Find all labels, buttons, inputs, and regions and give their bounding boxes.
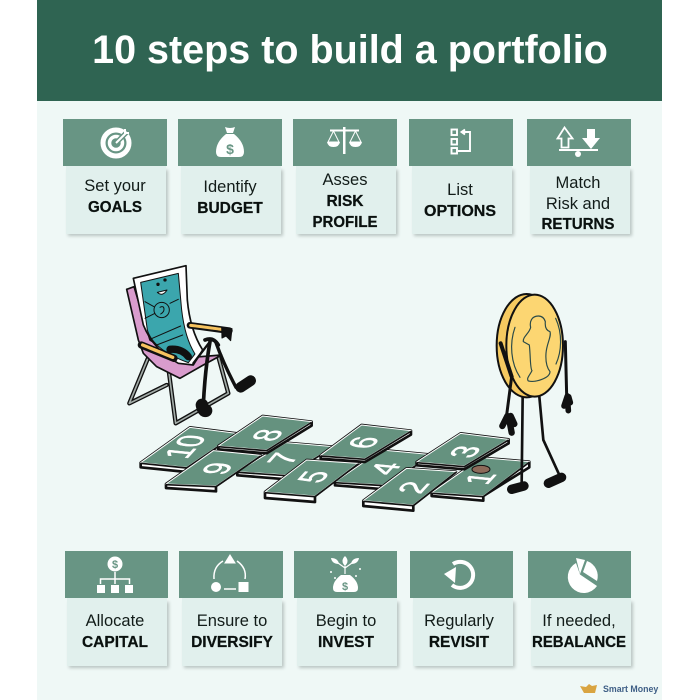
character limbs — [170, 339, 251, 411]
tile 8 — [218, 416, 312, 453]
text: identify budget: BUDGET — [197, 200, 263, 217]
tile 2: 2 — [388, 480, 438, 495]
title: 10 steps to build a portfolio — [92, 28, 608, 72]
armrest right — [190, 325, 232, 341]
panel: list options — [409, 119, 514, 236]
text: asses risk profile — [312, 171, 378, 231]
paper body — [133, 266, 203, 365]
text: match risk and returns: Risk and — [546, 195, 610, 213]
tile 7: 7 — [258, 451, 308, 466]
text: allocate capital: Allocate — [86, 612, 144, 630]
title banner — [37, 0, 662, 101]
tile 4 — [335, 450, 432, 489]
text: set your goals: Set your — [84, 177, 146, 195]
tile 5 — [265, 460, 358, 502]
illustration: coin character — [497, 294, 570, 489]
text: match risk and returns: RETURNS — [542, 216, 614, 233]
armrest left — [141, 345, 174, 358]
text: begin to invest — [316, 612, 376, 651]
tile 3 — [417, 433, 509, 469]
text: list options: List — [447, 181, 473, 199]
text: asses risk profile: PROFILE — [312, 214, 378, 231]
panel: ensure to diversify — [179, 551, 284, 668]
text: allocate capital — [82, 612, 148, 651]
text: regularly revisit: Regularly — [424, 612, 495, 630]
tile 6: 6 — [338, 435, 388, 450]
text: set your goals — [84, 177, 146, 216]
panel: identify budget — [178, 119, 283, 236]
text: set your goals: GOALS — [88, 199, 142, 216]
text: match risk and returns — [542, 174, 614, 233]
coin figure — [523, 316, 550, 381]
text: if needed, rebalance — [532, 612, 626, 651]
tile 9 — [166, 451, 261, 491]
panel: asses risk profile — [293, 119, 398, 236]
coin body — [497, 294, 563, 397]
chair frame — [129, 352, 228, 423]
text: asses risk profile: RISK — [326, 193, 364, 210]
text: ensure to diversify: DIVERSIFY — [191, 634, 274, 651]
tile 1: 1 — [455, 471, 505, 486]
coin legs — [512, 397, 562, 489]
icon: list — [452, 130, 470, 154]
icon: scales — [327, 127, 362, 154]
icon: circular arrow — [444, 562, 473, 588]
panel: allocate capital — [65, 551, 169, 668]
tile 6 — [321, 425, 411, 462]
text: regularly revisit: REVISIT — [429, 634, 490, 651]
panel: match risk and returns — [527, 119, 632, 236]
text: begin to invest: Begin to — [316, 612, 376, 630]
illustration: paper character in a folding chair — [127, 266, 251, 423]
icon: pie chart — [568, 558, 598, 593]
text: identify budget — [197, 178, 263, 217]
coin right arm — [564, 342, 570, 411]
chair fabric — [127, 287, 222, 378]
icon: target — [103, 129, 129, 156]
stone on tile 1 — [472, 465, 490, 473]
icon: org chart: $ — [112, 559, 118, 571]
text: identify budget: Identify — [203, 178, 257, 196]
icon: money bag: $ — [226, 141, 234, 157]
tile 8: 8 — [242, 427, 292, 443]
tile 1 — [432, 458, 529, 501]
tile 9: 9 — [192, 461, 242, 476]
logo: smart money: Smart Money — [603, 684, 658, 694]
icon: up and down arrows on balance — [558, 128, 600, 157]
text: allocate capital: CAPITAL — [82, 634, 148, 651]
paper teal face — [141, 273, 195, 363]
tile 3: 3 — [440, 444, 490, 460]
text: ensure to diversify: Ensure to — [197, 612, 267, 630]
tile 10 — [141, 427, 237, 472]
coin left arm — [501, 343, 514, 433]
tile 7 — [237, 443, 333, 479]
tile 5: 5 — [288, 469, 338, 485]
text: ensure to diversify — [191, 612, 274, 651]
text: list options — [424, 181, 496, 220]
text: if needed, rebalance: REBALANCE — [532, 634, 626, 651]
icon: plant growing from money bag: $ — [342, 581, 348, 593]
text: list options: OPTIONS — [424, 203, 496, 220]
face and bill details — [145, 278, 183, 345]
tile 10: 10 — [155, 433, 215, 460]
text: asses risk profile: Asses — [323, 171, 367, 189]
panel: if needed, rebalance — [528, 551, 633, 668]
panel: begin to invest — [294, 551, 399, 668]
text: match risk and returns: Match — [556, 174, 600, 192]
text: if needed, rebalance: If needed, — [542, 612, 616, 630]
panel: set your goals — [63, 119, 168, 236]
hopscotch court — [141, 416, 529, 511]
tile 4: 4 — [360, 461, 410, 476]
text: begin to invest: INVEST — [318, 634, 375, 651]
tile 2 — [363, 468, 456, 511]
icon: cycle of shapes — [211, 555, 248, 592]
panel: regularly revisit — [410, 551, 515, 668]
text: regularly revisit — [424, 612, 495, 651]
